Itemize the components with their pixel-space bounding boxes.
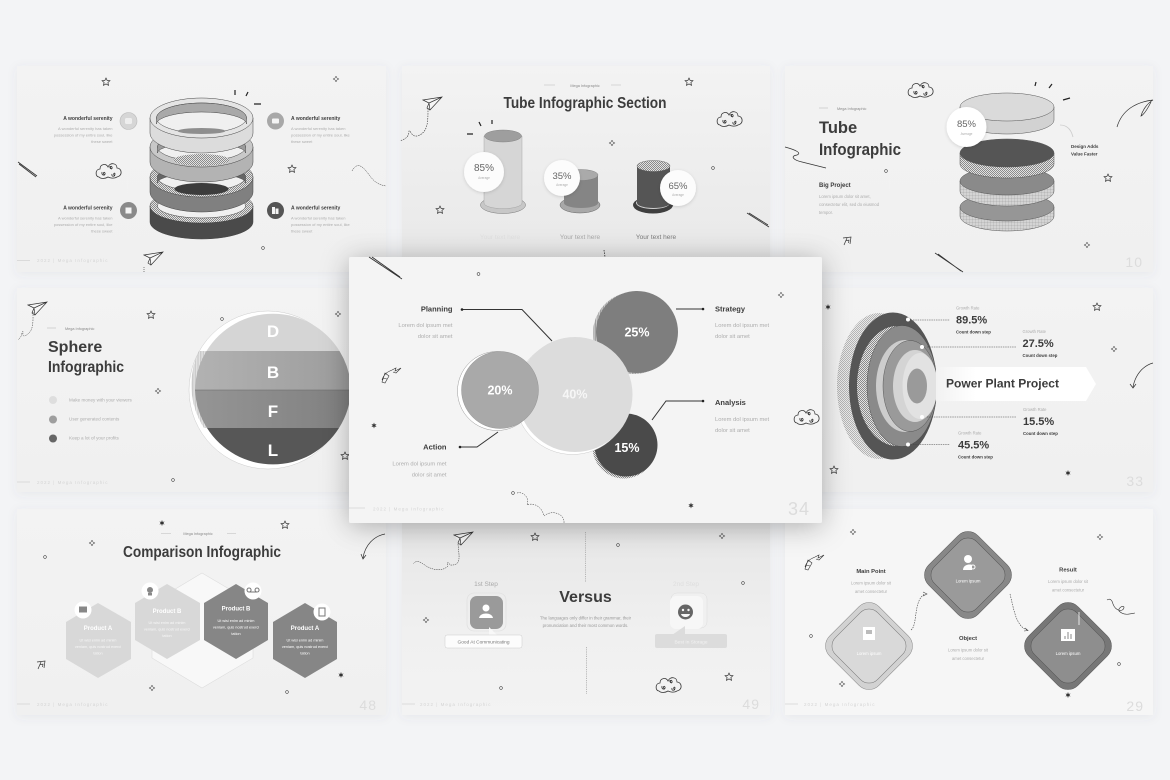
step 2 card xyxy=(655,581,727,648)
icon: top-left badge xyxy=(120,112,137,130)
doodles xyxy=(18,76,386,272)
tube labels: Your text here xyxy=(480,234,520,241)
panel: sphere slide xyxy=(17,288,386,492)
text: bottom-left: these sweet xyxy=(91,228,113,234)
leader dots xyxy=(459,308,704,448)
description: The languages only differ in their grammar, their xyxy=(540,616,632,620)
bubble: 85%: Average xyxy=(478,176,490,180)
text: bottom-right: these sweet xyxy=(291,228,313,234)
step 2 card: 2nd Step xyxy=(673,581,699,588)
stat: 15.5%: Count down step xyxy=(1023,431,1058,436)
list xyxy=(49,396,133,442)
eyebrow: Mega Infographic xyxy=(570,84,600,88)
diamond: left: Lorem ipsum xyxy=(857,651,882,656)
eyebrow: Mega Infographic xyxy=(183,532,213,536)
page number: 29 xyxy=(1126,698,1144,714)
background hexagon xyxy=(152,573,253,688)
doodles xyxy=(805,529,1135,698)
label: analysis: dolor sit amet xyxy=(715,428,750,434)
doodles xyxy=(400,78,769,257)
circle: 40%: 40% xyxy=(562,388,588,402)
footer: 2022 | Mega Infographic xyxy=(804,702,875,707)
stat: 45.5%: Growth Rate xyxy=(958,430,982,436)
text: object xyxy=(948,636,989,661)
diamond: center: Lorem ipsum xyxy=(956,578,981,584)
text: top-right: A wonderful serenity has taken xyxy=(291,126,345,131)
text block xyxy=(819,183,880,215)
text: bottom-left: possession of my entire soul, like xyxy=(54,222,113,227)
label: analysis: Analysis xyxy=(715,398,746,407)
step 1 card xyxy=(445,581,522,648)
text: top-right xyxy=(291,116,350,144)
stat: 27.5%: Growth Rate xyxy=(1022,329,1047,334)
stat: 27.5%: Count down step xyxy=(1022,353,1058,358)
title: Infographic xyxy=(819,141,901,159)
label: action: Action xyxy=(423,442,447,452)
icon: bottom-right badge xyxy=(267,202,284,219)
title: Tube xyxy=(819,119,857,137)
title: Infographic xyxy=(48,359,124,376)
hexagon: product B right: Ut wisi enim ad minim xyxy=(218,619,254,623)
disc stack chart xyxy=(960,93,1054,231)
leader lines xyxy=(460,309,703,447)
hexagon: product A right: veniam, quis nostrud exerci xyxy=(282,645,328,649)
text: result: Result xyxy=(1059,568,1077,574)
hexagon: product B right: tation xyxy=(231,632,241,636)
icon: top-right badge xyxy=(267,112,284,130)
circle: 25%: 25% xyxy=(624,326,650,340)
text block: Lorem ipsum dolor sit amet, xyxy=(819,194,871,199)
stat: 15.5%: Growth Rate xyxy=(1023,407,1047,412)
hexagon: product A left: Product A xyxy=(84,626,113,632)
eyebrow: Mega Infographic xyxy=(65,327,94,331)
hexagon: product B left: veniam, quis nostrud exerci xyxy=(144,628,190,632)
step 1 card: Good At Communicating xyxy=(458,640,510,646)
hexagon: product A right xyxy=(273,603,337,678)
arrow banner: Power Plant Project xyxy=(946,378,1059,390)
text: object: Lorem ipsum dolor sit xyxy=(948,648,989,652)
bubble: 35%: 35% xyxy=(552,171,572,182)
bubble: 35% xyxy=(544,160,580,196)
text: main point: amet consectetur xyxy=(855,589,888,594)
tube 3 xyxy=(633,160,673,214)
text block: tempor. xyxy=(819,210,833,215)
ring stack chart xyxy=(150,98,253,239)
icon: bottom-left badge xyxy=(120,202,137,219)
doodles xyxy=(413,532,744,692)
label: planning: dolor sit amet xyxy=(418,334,453,340)
text: result xyxy=(1048,568,1089,592)
text: object: Object xyxy=(959,636,977,642)
tube labels xyxy=(480,234,676,241)
callout text: Design Adds xyxy=(1071,144,1099,149)
stat: 15.5%: 15.5% xyxy=(1023,416,1054,428)
text: top-right: these sweet xyxy=(291,139,313,144)
circle: 25% xyxy=(593,291,678,374)
circle: 15% xyxy=(592,414,658,478)
tube labels: Your text here xyxy=(560,234,600,241)
bubble: 85%: 85% xyxy=(474,163,494,174)
label: planning xyxy=(398,304,453,340)
text: top-right: possession of my entire soul, like xyxy=(291,132,350,138)
hexagon: product B left: Product B xyxy=(153,609,182,615)
concentric ring chart xyxy=(837,312,938,460)
title: Versus xyxy=(559,589,612,606)
footer: 2022 | Mega Infographic xyxy=(420,702,491,707)
label: strategy: Strategy xyxy=(715,304,746,314)
sphere chart: L xyxy=(268,441,278,460)
hexagon: product B left: tation xyxy=(162,634,172,638)
hexagon: product B right xyxy=(204,584,268,659)
hexagon: product A right: Product A xyxy=(291,626,320,632)
icon badges xyxy=(74,582,330,620)
text: bottom-left: A wonderful serenity xyxy=(63,206,113,212)
text: bottom-right xyxy=(291,206,350,234)
text: result: amet consectetur xyxy=(1052,588,1085,592)
page number: 33 xyxy=(1126,473,1144,489)
label: strategy xyxy=(715,304,770,340)
title xyxy=(819,119,901,159)
bubble: 65% xyxy=(660,170,696,206)
panel: ring stack slide xyxy=(17,66,386,272)
stat: 27.5%: 27.5% xyxy=(1022,338,1054,350)
sphere chart xyxy=(189,311,351,469)
text: top-left: these sweet xyxy=(91,139,113,144)
text: bottom-right: possession of my entire soul, like xyxy=(291,222,350,227)
panel: process diamonds slide xyxy=(785,509,1153,715)
stat: 27.5% xyxy=(1022,329,1058,358)
page number: 10 xyxy=(1125,254,1143,270)
label: action: dolor sit amet xyxy=(412,472,447,478)
panel: center featured slide xyxy=(349,257,822,523)
list: Make money with your viewers xyxy=(69,398,133,402)
tube labels: Your text here xyxy=(636,234,676,241)
panel: tube slide xyxy=(400,66,770,272)
circle: 15%: 15% xyxy=(614,441,640,455)
label: action xyxy=(392,442,447,478)
arrowheads xyxy=(923,592,1028,631)
page number: 49 xyxy=(742,696,760,712)
stat: 15.5% xyxy=(1023,407,1058,436)
stat: 89.5%: Growth Rate xyxy=(956,306,980,310)
callout text xyxy=(1071,144,1099,156)
panel: power plant slide xyxy=(785,288,1153,492)
hexagon: product A left: tation xyxy=(93,652,103,656)
leaders xyxy=(913,320,1016,444)
stat: 45.5% xyxy=(958,430,993,460)
description xyxy=(540,616,632,628)
eyebrow xyxy=(819,107,866,111)
leader dots xyxy=(906,318,924,446)
arrow banner xyxy=(936,367,1096,401)
page number: 34 xyxy=(788,499,810,519)
text: top-left xyxy=(54,116,113,144)
list: Keep a lot of your profits xyxy=(69,436,119,440)
text: bottom-right: A wonderful serenity xyxy=(291,206,340,212)
arrow: callout xyxy=(1060,125,1073,137)
title: Tube Infographic Section xyxy=(504,95,666,112)
stat: 45.5%: 45.5% xyxy=(958,440,989,452)
label: action: Lorem dol ipsum met xyxy=(392,462,447,468)
text: main point: Lorem ipsum dolor sit xyxy=(851,580,892,586)
panel: versus slide xyxy=(402,509,770,715)
step 1 card: 1st Step xyxy=(474,581,498,588)
bubble: 85% xyxy=(464,152,504,192)
hexagon: product A left xyxy=(66,603,131,678)
bubble: 35%: Average xyxy=(556,183,568,187)
bubble: 85% xyxy=(946,107,986,147)
text: bottom-left xyxy=(54,206,113,234)
text: top-left: A wonderful serenity xyxy=(63,116,113,122)
text: top-right: A wonderful serenity xyxy=(291,116,340,122)
diamond: right: Lorem ipsum xyxy=(1056,651,1081,656)
diamond: right xyxy=(1019,597,1117,695)
text: main point: Main Point xyxy=(856,569,886,575)
circle: 40% xyxy=(515,337,632,454)
center dotted divider xyxy=(586,532,587,694)
text: top-left: possession of my entire soul, like xyxy=(54,132,113,138)
panel: tube stack slide xyxy=(785,66,1153,272)
eyebrow xyxy=(544,84,621,88)
hexagon: product B left: Ut wisi enim ad minim xyxy=(149,621,185,625)
hexagon: product A right: tation xyxy=(300,652,310,656)
diamond: left xyxy=(820,597,918,695)
arrows xyxy=(911,594,1027,630)
text block: Big Project xyxy=(819,183,851,189)
description: pronunciation and their most common words. xyxy=(543,623,628,628)
stat: 89.5%: 89.5% xyxy=(956,314,987,326)
label: planning: Lorem dol ipsum met xyxy=(398,323,453,329)
diamond: center xyxy=(919,526,1017,624)
stat: 45.5%: Count down step xyxy=(958,454,993,460)
callout text: Value Faster xyxy=(1071,152,1098,156)
title: Comparison Infographic xyxy=(123,544,281,561)
sphere chart: F xyxy=(268,402,278,421)
bubble: 65%: Average xyxy=(672,193,684,197)
text: top-left: A wonderful serenity has taken xyxy=(58,126,112,131)
text: bottom-right: A wonderful serenity has taken xyxy=(291,216,345,220)
text block: consectetur elit, sed do eiusmod xyxy=(819,202,880,207)
panel: comparison slide xyxy=(17,509,386,715)
hexagon: product A left: Ut wisi enim ad minim xyxy=(80,638,116,642)
tube 2 xyxy=(560,170,600,213)
title xyxy=(48,339,124,376)
circle: 20%: 20% xyxy=(487,384,513,398)
label: planning: Planning xyxy=(421,304,453,314)
footer: 2022 | Mega Infographic xyxy=(37,480,108,485)
step 2 card: Best In Storage xyxy=(674,640,708,646)
doodles xyxy=(369,257,819,523)
stat: 89.5% xyxy=(956,306,991,334)
doodles xyxy=(825,303,1153,476)
footer: 2022 | Mega Infographic xyxy=(373,506,444,512)
hexagon: product A left: veniam, quis nostrud exerci xyxy=(75,645,121,649)
list: User generated contents xyxy=(69,416,120,422)
doodles xyxy=(785,82,1153,272)
circle: 20% xyxy=(458,352,538,430)
hexagon: product B right: veniam, quis nostrud exerci xyxy=(213,626,259,630)
eyebrow: Mega Infographic xyxy=(837,107,866,111)
doodles xyxy=(37,520,385,693)
doodles xyxy=(18,302,349,481)
text: object: amet consectetur xyxy=(952,656,985,661)
tube 1 xyxy=(480,130,526,214)
hexagon: product A right: Ut wisi enim ad minim xyxy=(287,638,323,642)
text: main point xyxy=(851,569,892,594)
bubble: 65%: 65% xyxy=(668,181,688,192)
hexagon: product B left xyxy=(135,584,200,659)
footer: 2022 | Mega Infographic xyxy=(37,702,108,707)
page number: 48 xyxy=(359,697,377,713)
title: Sphere xyxy=(48,339,102,356)
stat: 89.5%: Count down step xyxy=(956,330,991,334)
sphere chart: B xyxy=(267,363,279,382)
label: strategy: Lorem dol ipsum met xyxy=(715,323,770,329)
text: bottom-left: A wonderful serenity has taken xyxy=(58,216,112,220)
label: strategy: dolor sit amet xyxy=(715,334,750,340)
eyebrow xyxy=(161,532,236,536)
hexagon: product B right: Product B xyxy=(222,606,251,612)
footer: 2022 | Mega Infographic xyxy=(37,258,108,263)
text: result: Lorem ipsum dolor sit xyxy=(1048,579,1089,584)
bubble: 85%: Average xyxy=(961,132,973,136)
badge glyphs xyxy=(125,118,279,214)
eyebrow xyxy=(47,327,94,331)
sphere chart: D xyxy=(267,322,279,341)
label: analysis: Lorem dol ipsum met xyxy=(715,417,770,423)
label: analysis xyxy=(715,398,770,434)
bubble: 85%: 85% xyxy=(957,119,977,130)
